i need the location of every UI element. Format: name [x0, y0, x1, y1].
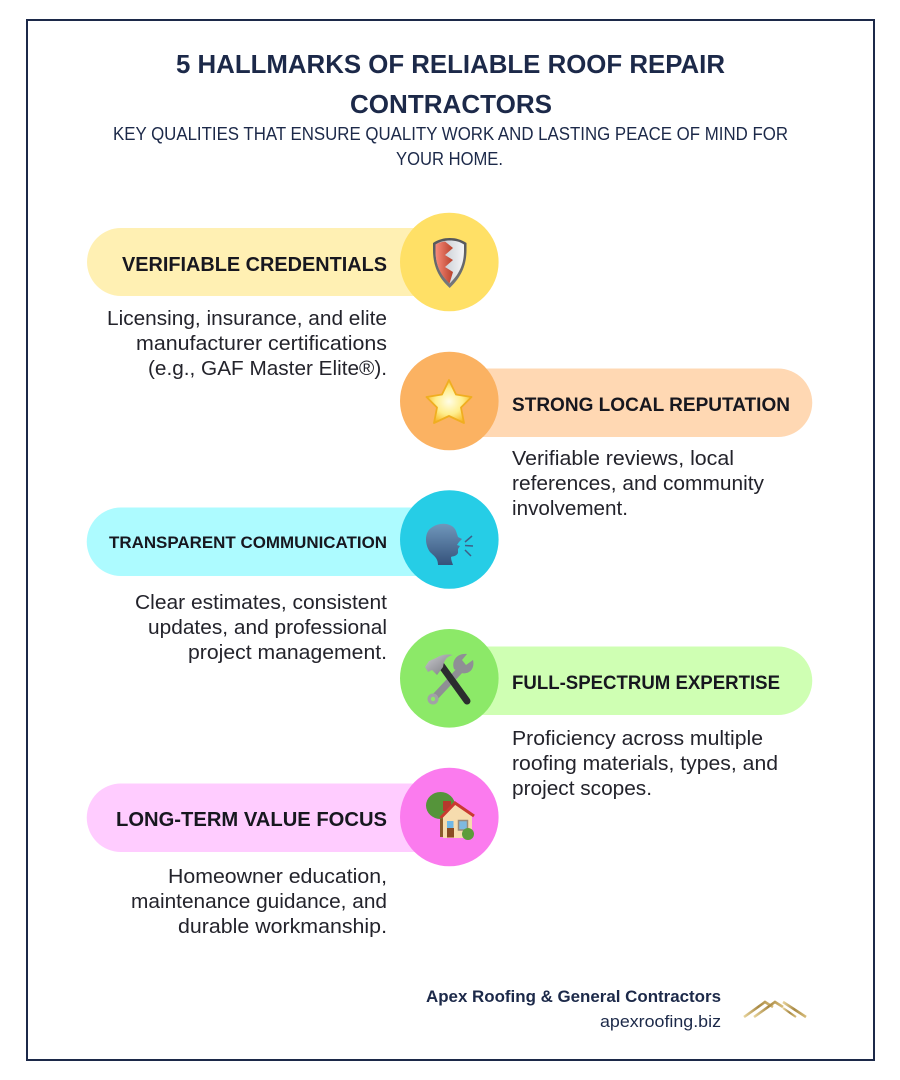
panel: transparent communication [87, 490, 499, 664]
heading: long-term value focus: LONG-TERM VALUE FOCUS [116, 809, 387, 831]
pill: verifiable credentials [87, 228, 450, 296]
subtitle: YOUR HOME. [396, 149, 503, 169]
heading: strong local reputation: STRONG LOCAL REPUTATION [512, 395, 790, 416]
description: long-term value focus [131, 865, 387, 938]
subtitle: KEY QUALITIES THAT ENSURE QUALITY WORK AND LASTING PEACE OF MIND FOR [113, 124, 788, 144]
description: verifiable credentials [107, 307, 387, 380]
pill: long-term value focus [87, 784, 450, 852]
circle: verifiable credentials [400, 213, 499, 311]
description: full-spectrum expertise [512, 727, 778, 800]
heading: transparent communication: TRANSPARENT COMMUNICATION [109, 533, 387, 552]
description: strong local reputation [512, 447, 765, 520]
pill: full-spectrum expertise [449, 646, 812, 715]
description: long-term value focus: maintenance guidance, and [131, 890, 387, 913]
description: transparent communication [135, 591, 387, 664]
description: strong local reputation: references, and community [512, 472, 765, 495]
panel: strong local reputation [400, 352, 812, 520]
panel: full-spectrum expertise [400, 629, 812, 800]
description: long-term value focus: durable workmanship. [178, 915, 387, 938]
description: transparent communication: Clear estimates, consistent [135, 591, 387, 614]
title: 5 HALLMARKS OF RELIABLE ROOF REPAIR [176, 49, 725, 79]
description: verifiable credentials: manufacturer certifications [136, 332, 387, 355]
footer: website: apexroofing.biz [600, 1012, 721, 1031]
description: full-spectrum expertise: roofing materials, types, and [512, 752, 778, 775]
panel: long-term value focus [87, 768, 499, 938]
logo: roof [744, 1002, 806, 1017]
description: strong local reputation: Verifiable reviews, local [512, 447, 734, 470]
description: transparent communication: updates, and professional [148, 616, 387, 639]
icon: star [426, 380, 472, 423]
icon: shield [433, 238, 466, 288]
heading: full-spectrum expertise: FULL-SPECTRUM EXPERTISE [512, 673, 780, 694]
icon: hammer and wrench [425, 654, 473, 704]
heading: verifiable credentials: VERIFIABLE CREDENTIALS [122, 254, 387, 276]
title [176, 49, 725, 119]
title: CONTRACTORS [350, 89, 552, 119]
description: verifiable credentials: (e.g., GAF Master Elite®). [148, 357, 387, 380]
icon: speaking head [426, 524, 473, 565]
circle: full-spectrum expertise [400, 629, 499, 728]
pill: strong local reputation [449, 368, 812, 437]
circle: transparent communication [400, 490, 499, 589]
description: strong local reputation: involvement. [512, 497, 628, 520]
circle: long-term value focus [400, 768, 499, 866]
description: full-spectrum expertise: Proficiency across multiple [512, 727, 763, 750]
description: long-term value focus: Homeowner education, [168, 865, 387, 888]
description: full-spectrum expertise: project scopes. [512, 777, 652, 800]
icon: house with tree [426, 792, 474, 840]
footer: company name: Apex Roofing & General Contractors [426, 988, 721, 1006]
pill: transparent communication [87, 508, 450, 576]
panel: verifiable credentials [87, 213, 499, 380]
circle: strong local reputation [400, 352, 499, 450]
subtitle [113, 124, 788, 169]
description: verifiable credentials: Licensing, insurance, and elite [107, 307, 387, 330]
description: transparent communication: project management. [188, 641, 387, 664]
